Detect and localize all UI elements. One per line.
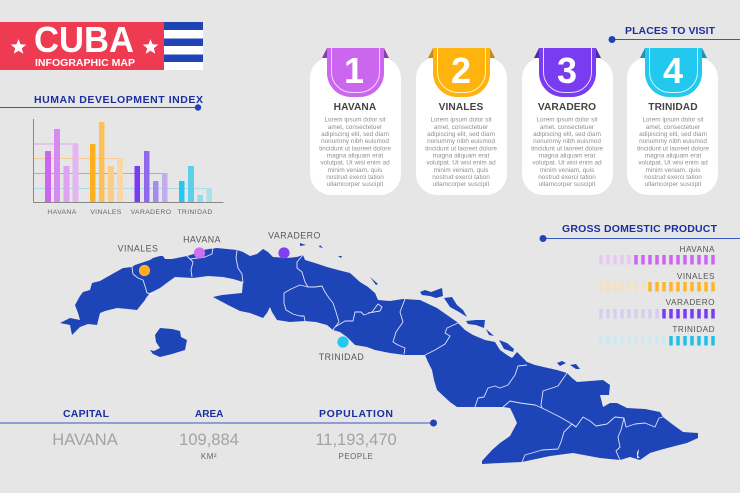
- card: Varadero: minim veniam, quis: [540, 167, 594, 174]
- card: Vinales: nostrud exerci tation: [432, 174, 490, 181]
- map: Isle of Youth: [150, 328, 187, 357]
- card: Varadero: 3: [557, 50, 577, 91]
- card: Havana: volutpat. Ut wisi enim ad: [320, 160, 390, 167]
- card: Vinales: volutpat. Ut wisi enim ad: [426, 160, 496, 167]
- card: Havana: nonummy nibh euismod: [321, 138, 389, 145]
- card: Havana: amet, consectetuer: [328, 124, 383, 131]
- stat: capital: CAPITAL: [63, 408, 110, 420]
- heading: human development index: [0, 94, 203, 111]
- GDP bar: Vinales: [601, 272, 715, 292]
- card: Vinales: Lorem ipsum dolor sit: [430, 117, 492, 124]
- card: Trinidad: magna aliquam erat: [645, 152, 701, 160]
- card: Havana: ullamcorper suscipit: [327, 181, 383, 188]
- card: Vinales: magna aliquam erat: [433, 152, 489, 160]
- bar chart: HAVANA: [47, 209, 77, 216]
- GDP bar: Havana: HAVANA: [680, 245, 715, 254]
- card: Trinidad: minim veniam, quis: [646, 167, 700, 174]
- heading: places to visit: PLACES TO VISIT: [625, 25, 716, 37]
- card: Trinidad: adipiscing elit, sed diam: [639, 131, 707, 138]
- card: Havana: minim veniam, quis: [328, 167, 382, 174]
- card: Havana: adipiscing elit, sed diam: [321, 131, 389, 138]
- map of Cuba: [60, 243, 698, 464]
- GDP bar: Havana: [601, 245, 715, 264]
- map: province borders: [132, 248, 663, 462]
- pin: Vinales: [118, 244, 158, 276]
- card: Trinidad: [627, 48, 718, 195]
- stat: population: 11,193,470: [315, 431, 397, 449]
- card: Vinales: minim veniam, quis: [434, 167, 488, 174]
- card: Havana: nostrud exerci tation: [326, 174, 384, 181]
- card: Trinidad: amet, consectetuer: [646, 124, 701, 131]
- stat: area: [179, 409, 239, 461]
- card: Trinidad: volutpat. Ut wisi enim ad: [638, 160, 708, 167]
- pin: Trinidad: TRINIDAD: [319, 352, 364, 362]
- pin: Havana: [183, 234, 221, 259]
- card: Havana: [310, 48, 401, 195]
- stat: population: PEOPLE: [338, 452, 374, 461]
- card: Trinidad: nostrud exerci tation: [644, 174, 702, 181]
- stat: population: [315, 408, 397, 461]
- heading: human development index: HUMAN DEVELOPMENT INDEX: [34, 94, 203, 106]
- card: Varadero: nonummy nibh euismod: [533, 138, 601, 145]
- card: Varadero: adipiscing elit, sed diam: [533, 131, 601, 138]
- GDP bar: Varadero: VARADERO: [666, 298, 715, 307]
- card: Varadero: [522, 48, 613, 195]
- card: Vinales: 2: [451, 50, 471, 91]
- card: Vinales: nonummy nibh euismod: [427, 138, 495, 145]
- card: Trinidad: TRINIDAD: [648, 102, 698, 113]
- card: Vinales: ullamcorper suscipit: [433, 181, 489, 188]
- heading: gross domestic product: [540, 223, 740, 242]
- pin: Varadero: VARADERO: [268, 230, 321, 240]
- stats divider line: [0, 422, 433, 424]
- card: Vinales: tincidunt ut laoreet dolore: [425, 145, 497, 152]
- card: Havana: tincidunt ut laoreet dolore: [319, 145, 391, 152]
- GDP bar: Vinales: VINALES: [677, 272, 715, 281]
- stat: capital: HAVANA: [52, 431, 118, 449]
- stat: population: POPULATION: [319, 408, 393, 420]
- bar chart: TRINIDAD: [177, 209, 213, 216]
- card: Varadero: volutpat. Ut wisi enim ad: [532, 160, 602, 167]
- stats dot: [430, 420, 437, 426]
- bar chart: [34, 119, 224, 216]
- pin: Vinales: VINALES: [118, 244, 158, 254]
- GDP bar: Trinidad: TRINIDAD: [672, 325, 715, 334]
- card: Vinales: amet, consectetuer: [434, 124, 489, 131]
- pin: Havana: HAVANA: [183, 234, 221, 244]
- map: main island: [60, 248, 698, 464]
- card: Varadero: amet, consectetuer: [540, 124, 595, 131]
- card: Varadero: tincidunt ut laoreet dolore: [531, 145, 603, 152]
- card: Vinales: adipiscing elit, sed diam: [427, 131, 495, 138]
- card: Trinidad: tincidunt ut laoreet dolore: [637, 145, 709, 152]
- stat: area: AREA: [195, 409, 223, 420]
- heading: places to visit: [608, 25, 740, 43]
- card: Vinales: [416, 48, 507, 195]
- title banner: [0, 19, 203, 70]
- card: Havana: Lorem ipsum dolor sit: [324, 117, 386, 124]
- stat: area: KM²: [201, 452, 217, 461]
- stat: capital: [52, 408, 118, 449]
- icon: flag stripes: [164, 22, 203, 70]
- card: Varadero: VARADERO: [538, 102, 596, 113]
- GDP bar: Trinidad: [601, 325, 715, 346]
- map: bay on south-east coast: [637, 449, 640, 458]
- heading: gross domestic product: GROSS DOMESTIC PRODUCT: [562, 223, 718, 235]
- pin: Varadero: [268, 230, 321, 259]
- card: Havana: 1: [344, 50, 364, 91]
- card: Varadero: nostrud exerci tation: [538, 174, 596, 181]
- card: Trinidad: Lorem ipsum dolor sit: [642, 117, 704, 124]
- card: Trinidad: nonummy nibh euismod: [639, 138, 707, 145]
- bar chart: VINALES: [90, 209, 122, 216]
- card: Varadero: Lorem ipsum dolor sit: [536, 117, 598, 124]
- card: Varadero: magna aliquam erat: [539, 152, 595, 160]
- card: Varadero: ullamcorper suscipit: [539, 181, 595, 188]
- card: Trinidad: ullamcorper suscipit: [645, 181, 701, 188]
- card: Havana: magna aliquam erat: [327, 152, 383, 160]
- bar chart: VARADERO: [131, 209, 171, 216]
- title banner: INFOGRAPHIC MAP: [35, 57, 135, 69]
- GDP bar: Varadero: [601, 298, 715, 318]
- map: north cays: [300, 243, 580, 369]
- pin: Trinidad: [319, 336, 364, 362]
- card: Trinidad: 4: [663, 50, 683, 91]
- card: Vinales: VINALES: [439, 102, 484, 113]
- title banner: CUBA: [34, 19, 134, 60]
- stat: area: 109,884: [179, 431, 239, 449]
- card: Havana: HAVANA: [334, 102, 377, 113]
